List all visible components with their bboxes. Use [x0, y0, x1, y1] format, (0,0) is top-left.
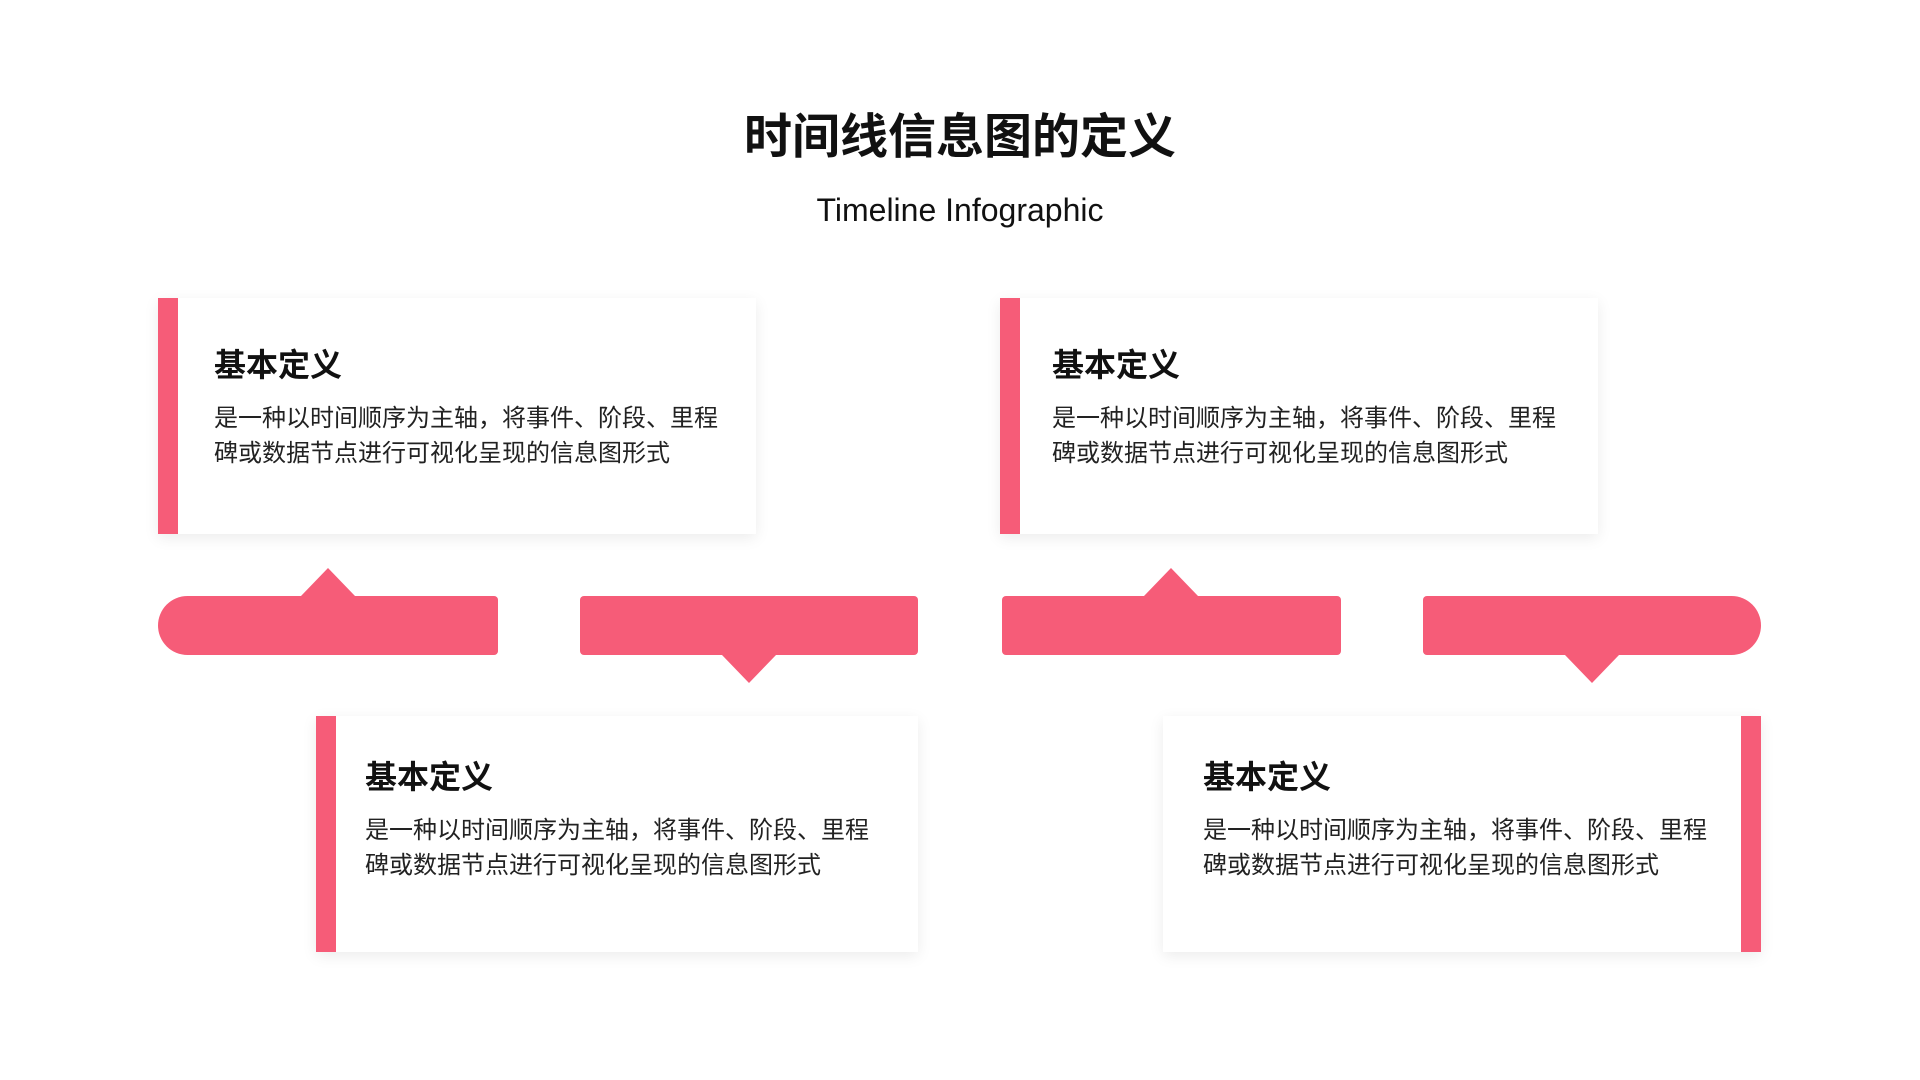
- subtitle: Timeline Infographic: [817, 192, 1103, 228]
- card 3: 是一种以时间顺序为主轴，将事件、阶段、里程碑或数据节点进行可视化呈现的信息图形式: [365, 817, 869, 879]
- card 1: 基本定义: [214, 347, 342, 383]
- timeline segment 1: [158, 568, 498, 655]
- card 2: 基本定义: [1052, 347, 1180, 383]
- timeline segment 3: [1002, 568, 1341, 655]
- card 3: 基本定义: [365, 759, 493, 795]
- card 4: [1163, 716, 1761, 952]
- card 2: [1000, 298, 1598, 534]
- timeline segment 4: [1423, 596, 1761, 683]
- card 4: 基本定义: [1203, 759, 1331, 795]
- card 4: 是一种以时间顺序为主轴，将事件、阶段、里程碑或数据节点进行可视化呈现的信息图形式: [1203, 817, 1707, 879]
- card 1: 是一种以时间顺序为主轴，将事件、阶段、里程碑或数据节点进行可视化呈现的信息图形式: [214, 405, 718, 467]
- card 1: [158, 298, 756, 534]
- title: 时间线信息图的定义: [744, 111, 1176, 164]
- card 2: 是一种以时间顺序为主轴，将事件、阶段、里程碑或数据节点进行可视化呈现的信息图形式: [1052, 405, 1556, 467]
- card 3: [316, 716, 918, 952]
- timeline segment 2: [580, 596, 918, 683]
